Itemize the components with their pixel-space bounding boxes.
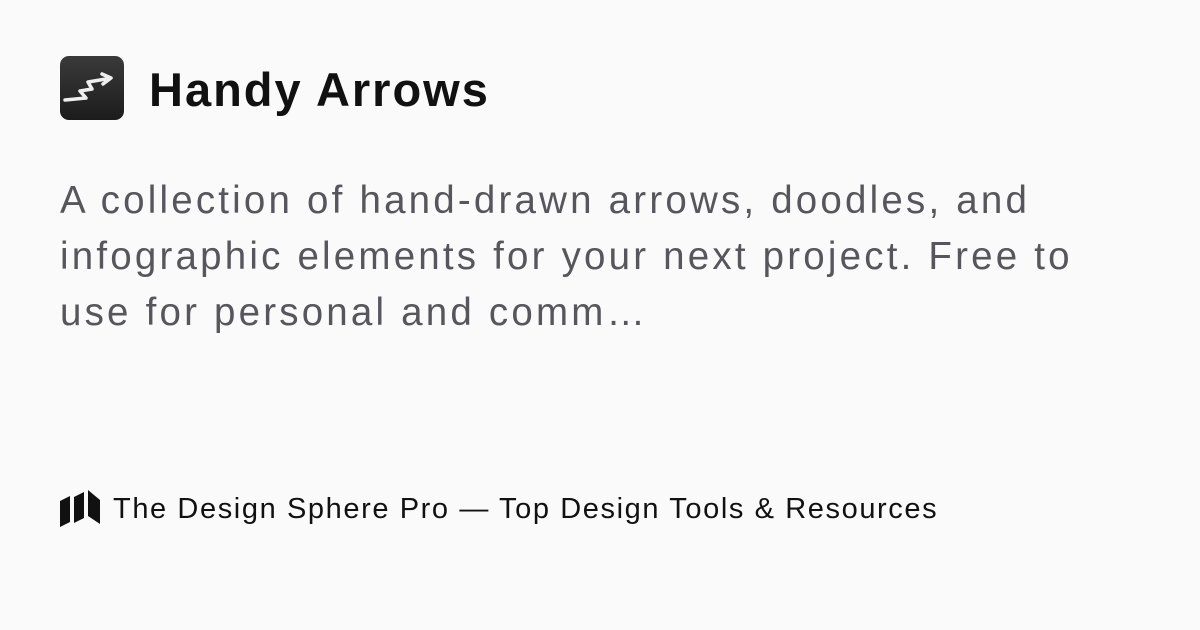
description text: infographic elements for your next project. Free to: [60, 235, 1073, 278]
footer: brand: [60, 490, 938, 527]
description text: use for personal and comm…: [60, 291, 648, 334]
icon: brand logo: [60, 490, 100, 527]
icon: app logo: [60, 56, 124, 120]
description text: [60, 179, 1073, 334]
description text: A collection of hand-drawn arrows, doodles, and: [60, 179, 1030, 222]
footer text: The Design Sphere Pro — Top Design Tools & Resources: [113, 493, 938, 525]
title: Handy Arrows: [149, 63, 490, 116]
